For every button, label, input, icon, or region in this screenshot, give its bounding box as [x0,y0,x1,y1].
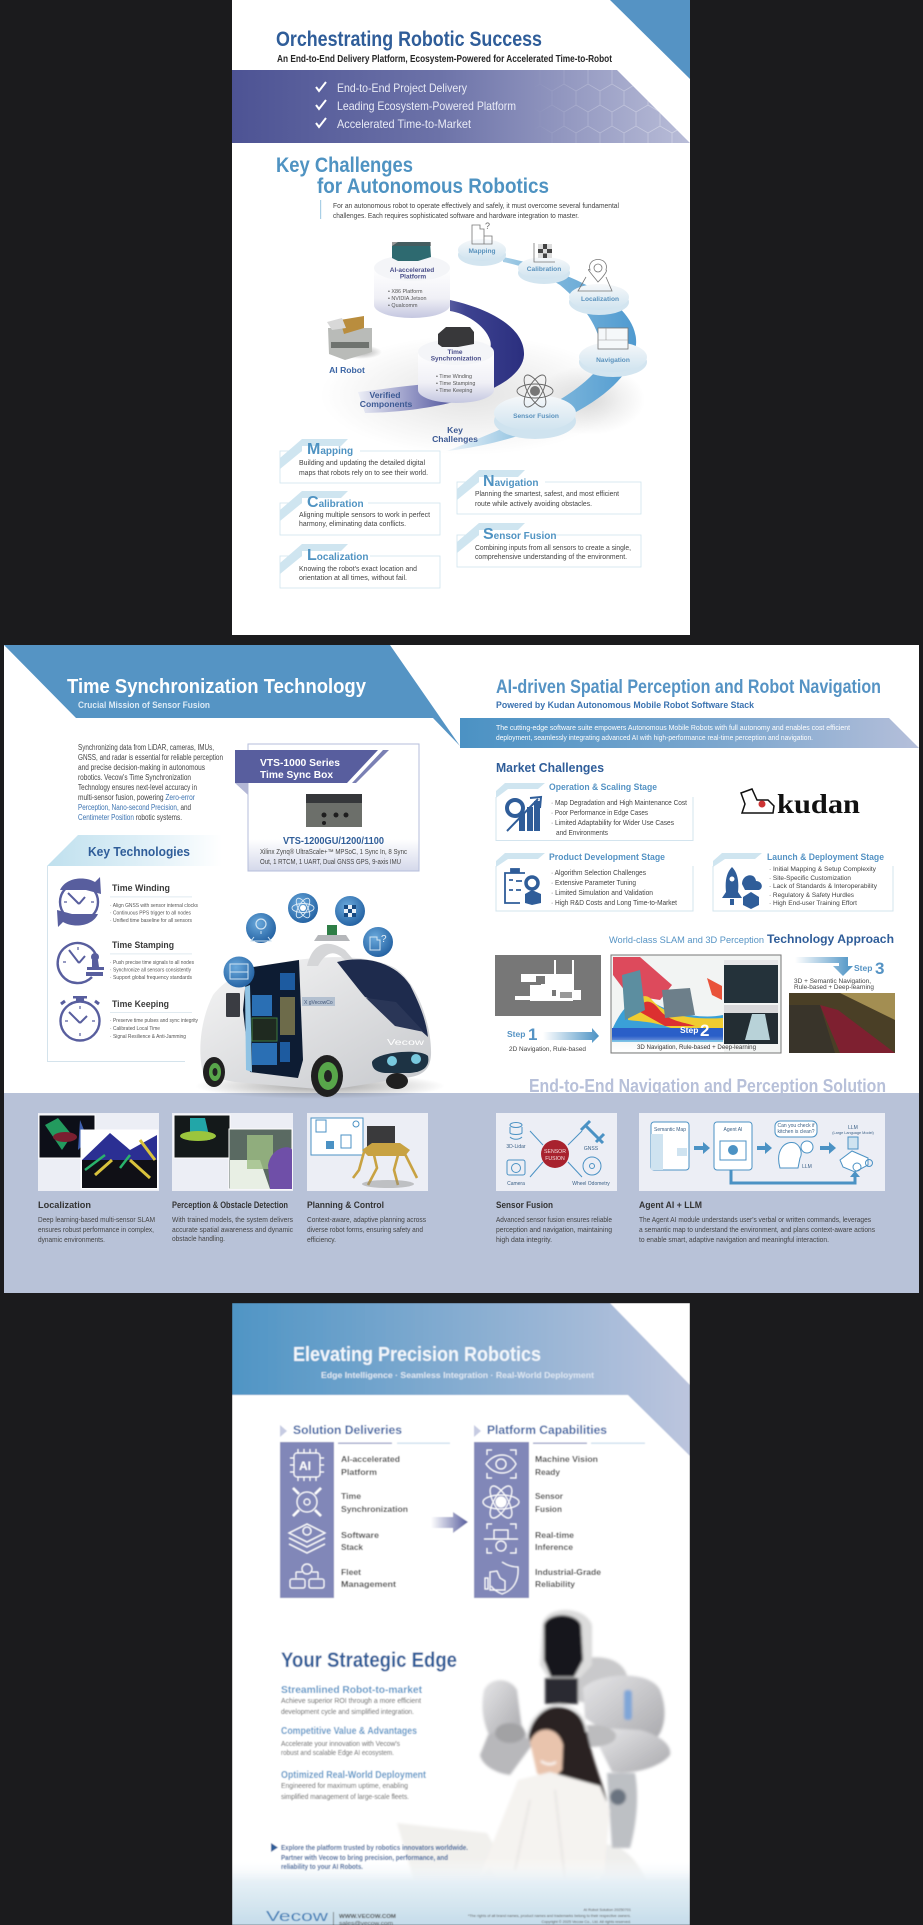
cylinder: time synchronization: • Time Keeping [436,388,472,394]
robot neck [545,1678,578,1704]
panel: vts-1000 series: VTS-1000 Series [260,758,340,769]
2d map [515,960,581,1001]
label: key challenges [432,425,478,444]
header ribbon: time synchronization: Time Synchronization Technology [67,676,367,698]
logo: kudan [741,789,860,819]
list labels: Software [341,1530,379,1540]
text: time winding [110,883,198,924]
windshield [337,959,428,1037]
headlights [372,1052,428,1073]
step 3: Step [854,963,872,973]
column: perception and obstacle detection [172,1113,293,1243]
robot right arm [583,1676,665,1740]
title: Orchestrating Robotic Success [276,28,542,51]
card: operation and scaling: · Limited Adaptability for Wider Use Cases [551,818,674,827]
icon: mapping ball: ? [381,934,387,945]
disc: navigation: Navigation [596,357,630,364]
list labels: Stack [341,1542,363,1552]
section heading: key challenges [276,154,549,198]
panel: key technologies: Key Technologies [88,845,190,859]
column: sensor fusion: Sensor Fusion [496,1200,553,1211]
agent pipeline diagram: LLM [802,1164,812,1170]
icon: localization ball [246,913,276,943]
card: operation and scaling [496,782,693,840]
cylinder: time synchronization [418,327,494,403]
cylinder: ai-accelerated platform: • X86 Platform [388,289,423,295]
panel: solution deliveries [280,1425,450,1598]
sensor fusion diagram: GNSS [584,1146,599,1152]
headband [527,1705,587,1738]
disc: mapping: ? [485,221,490,231]
blue arc [447,257,636,451]
robot lower body [607,1773,637,1848]
device: platform box [392,242,431,261]
header ribbon: Edge Intelligence · Seamless Integration · Real-World Deployment [321,1371,594,1380]
card: operation and scaling: Operation & Scaling Stage [549,782,657,793]
benefit: streamlined robot-to-market: Streamlined Robot-to-market [281,1684,422,1696]
laptop [397,1823,517,1891]
list labels: Management [341,1579,396,1589]
disc: sensor fusion [494,372,576,439]
footer: logo and contact: *The rights of all brand names, product names and trademarks belong to their respective owners. [468,1914,631,1918]
check list: Accelerated Time-to-Market [337,117,472,131]
text: time stamping: · Support global frequency standards [110,975,192,981]
cylinder: time synchronization: Synchronization [431,356,481,362]
text: time keeping: Time Keeping [112,999,169,1010]
card: launch and deployment: · Lack of Standards & Interoperability [769,883,878,890]
cylinder: ai-accelerated platform: Platform [400,274,426,280]
photo: robot and woman with headset [397,1610,670,1892]
list labels [535,1454,601,1589]
door label: X gVecowCo [304,1000,333,1006]
door label [302,997,335,1006]
intro text [320,200,619,220]
text: time keeping: · Signal Resilience & Anti-Jamming [110,1034,186,1040]
card: launch and deployment: · Site-Specific Customization [769,875,851,882]
column: planning and control: efficiency. [307,1235,336,1244]
panel: vts-1000 series: Out, 1 RTCM, 1 UART, Dual GNSS GPS, 9-axis IMU [260,859,401,866]
intro paragraph [78,743,223,822]
text: time stamping: · Push precise time signals to all nodes [110,960,194,966]
list labels: Machine Vision [535,1454,598,1464]
list labels: Ready [535,1467,560,1477]
intro paragraph: Technology ensures next-level accuracy in [78,783,197,792]
heading: technology approach [609,932,894,946]
panel: platform capabilities: Platform Capabilities [487,1425,607,1437]
plan panel and robot dog [311,1118,417,1188]
card: operation and scaling: · Poor Performance in Edge Cases [551,808,648,817]
column: planning and control: Planning & Control [307,1200,384,1211]
column: planning and control [307,1113,428,1244]
step 3: 3D + Semantic Navigation, [794,978,871,985]
sensor fusion diagram [506,1121,610,1187]
list labels [341,1454,408,1589]
icon: ai chip: AI [299,1459,311,1473]
benefit: optimized deployment: Engineered for maximum uptime, enabling [281,1783,408,1790]
icon: rocket and cloud [722,867,762,909]
list labels: Fusion [535,1504,562,1514]
icon: mapping ball [363,927,393,957]
list labels: Synchronization [341,1504,408,1514]
panel: vts-1000 series: VTS-1200GU/1200/1100 [283,836,384,847]
icon: shield [485,1562,518,1594]
disc: mapping [458,221,506,266]
lidar images [39,1115,158,1189]
text: time winding: · Continuous PPS trigger to all nodes [110,910,191,916]
footer: logo and contact: Vecow [266,1908,328,1925]
text: time winding: · Align GNSS with sensor internal clocks [110,903,198,909]
card: localization: orientation at all times, without fail. [299,573,407,582]
list labels: Time [341,1491,361,1501]
footer: logo and contact: Copyright © 2025 Vecow Co., Ltd. All rights reserved. [541,1920,631,1924]
banner: three benefits [232,70,690,143]
panel: vts-1000 series [235,744,419,871]
intro paragraph: and precise decision-making in autonomous [78,763,205,772]
section heading: key challenges: for Autonomous Robotics [317,175,549,198]
step 2: Step [680,1025,698,1035]
sensor fusion diagram: Wheel Odometry [572,1181,610,1187]
heading: your strategic edge: Your Strategic Edge [281,1649,457,1672]
page 2: technology spread [4,645,919,1293]
icon: fleet management [290,1564,324,1588]
cylinder: time synchronization: • Time Winding [436,374,472,380]
card: launch and deployment: · Regulatory & Safety Hurdles [769,892,855,899]
column: sensor fusion: Advanced sensor fusion ensures reliable [496,1215,612,1224]
cylinder: ai-accelerated platform [374,242,450,318]
column: localization: ensures robust performance in complex, [38,1225,154,1234]
icon: software stack [289,1524,325,1553]
icon: ai chip [290,1449,324,1481]
icon: ai robot [327,316,382,360]
step 1: Step [507,1029,525,1039]
list labels: Industrial-Grade [535,1567,601,1577]
icon: checklist and gear [505,869,541,905]
icon: time winding [57,877,101,927]
page 1: orchestrating robotic success [232,0,690,635]
step 1: 2D Navigation, Rule-based [509,1046,586,1053]
call to action: Explore the platform trusted by robotics innovators worldwide. [281,1845,468,1852]
cylinder: ai-accelerated platform: • Qualcomm [388,303,418,309]
subtitle: An End-to-End Delivery Platform, Ecosystem-Powered for Accelerated Time-to-Robot [277,54,613,65]
column: perception and obstacle detection: With trained models, the system delivers [172,1215,293,1224]
footer: logo and contact [266,1908,631,1925]
list labels: Real-time [535,1530,574,1540]
logo: kudan: kudan [777,789,860,819]
panel: vts-1000 series: Time Sync Box [260,770,333,781]
call to action [271,1843,468,1871]
heading: end-to-end solution: End-to-End Navigation and Perception Solution [529,1076,886,1096]
column: localization: dynamic environments. [38,1235,105,1244]
intro text: challenges. Each requires sophisticated software and hardware integration to master. [333,211,579,220]
card: sensor fusion: comprehensive understanding of the environment. [475,552,627,561]
disc: localization: Localization [581,296,619,303]
label: verified components: Verified [369,390,401,400]
ribbon: software stack summary [460,718,919,748]
label: key challenges: Key [447,425,463,435]
text: time keeping: · Calibrated Local Time [110,1026,160,1032]
card: operation and scaling: · Map Degradation and High Maintenance Cost [551,798,687,807]
icon: time keeping [60,996,100,1040]
illustration: autonomous vehicle: Vecow [387,1037,425,1047]
text: time stamping: · Synchronize all sensors consistently [110,968,191,974]
benefit: competitive value [281,1725,417,1757]
cylinder: ai-accelerated platform: • NVIDIA Jetson [388,296,426,302]
card: calibration: harmony, eliminating data conflicts. [299,519,406,528]
card: product development: Product Development Stage [549,852,665,863]
icon: inference [484,1524,518,1553]
list labels: Inference [535,1542,573,1552]
card: sensor fusion: Combining inputs from all sensors to create a single, [475,543,631,552]
list labels: AI-accelerated [341,1454,400,1464]
arrow [795,957,853,976]
intro paragraph: robotics. Vecow's Time Synchronization [78,773,191,782]
step 3: Rule-based + Deep-learning [794,984,874,991]
heading: market challenges: Market Challenges [496,761,604,775]
card: mapping: Mapping [307,441,353,458]
card: product development: · Extensive Parameter Tuning [551,878,636,887]
agent pipeline diagram: Agent AI [724,1127,742,1133]
disc: sensor fusion: Sensor Fusion [513,413,559,420]
icon: sensor fusion ball [288,893,318,923]
header ribbon [232,1303,690,1456]
footer gradient [232,1858,690,1925]
card: operation and scaling: and Environments [556,828,608,837]
card: calibration [280,491,440,535]
benefit: competitive value: Accelerate your innovation with Vecow's [281,1741,400,1748]
cargo doorway [226,960,303,1078]
ribbon [235,783,248,795]
card: mapping [280,439,440,483]
icon: time stamping [58,943,104,983]
step 2: 2 [700,1021,709,1040]
section heading: key challenges: Key Challenges [276,154,413,177]
heading: technology approach: Technology Approach [767,932,894,946]
disc: calibration: Calibration [527,266,561,273]
heatmap [612,957,724,1052]
label: key challenges: Challenges [432,434,478,444]
card: launch and deployment: · High End-user Training Effort [769,900,857,907]
card: product development [496,852,693,911]
column: agent ai and llm: to enable smart, adaptive navigation and meaningful interaction. [639,1235,829,1244]
heading: technology approach: World-class SLAM and 3D Perception [609,935,764,945]
arrow: deliveries to capabilities [431,1512,468,1533]
illustration: autonomous vehicle [195,925,445,1099]
header ribbon: time synchronization: Crucial Mission of Sensor Fusion [78,700,210,711]
icon: navigation ball [224,956,254,988]
step 3 [789,957,895,1053]
column: localization [38,1113,159,1244]
card: launch and deployment: · Initial Mapping & Setup Complexity [769,866,877,873]
agent pipeline diagram: (Large Language Model) [832,1131,875,1135]
intro text: For an autonomous robot to operate effectively and safely, it must overcome several fundamental [333,201,619,210]
ribbon: software stack summary: deployment, seamlessly integrating advanced AI with high-performance real-time perception and navigation. [496,735,813,742]
card: sensor fusion [457,523,641,567]
text: time stamping: Time Stamping [112,940,174,951]
sensor fusion diagram: 3D-Lidar [506,1144,526,1150]
roof arch and sensor [307,944,358,966]
column: planning and control: Context-aware, adaptive planning across [307,1215,426,1224]
step 1: 1 [528,1025,537,1044]
column: perception and obstacle detection: obstacle handling. [172,1234,225,1243]
woman face [530,1730,563,1783]
card: localization: Knowing the robot's exact location and [299,564,417,573]
panel: key technologies [47,835,222,1062]
device photo [306,794,362,827]
disc: mapping: Mapping [468,248,496,255]
card: product development: · High R&D Costs and Long Time-to-Market [551,898,677,907]
wheels [203,1055,408,1097]
disc: navigation [579,328,647,377]
card: localization: Localization [307,547,368,564]
column: localization: Localization [38,1200,91,1211]
cylinder: time synchronization: • Time Stamping [436,381,475,387]
card: calibration: Calibration [307,494,364,511]
card: launch and deployment [713,852,893,911]
panel: vts-1000 series: Xilinx Zynq® UltraScale+™ MPSoC, 1 Sync In, 8 Sync [260,848,407,856]
icon: eye [486,1450,516,1478]
column: perception and obstacle detection: accurate spatial awareness and dynamic [172,1225,293,1234]
agent pipeline diagram: kitchen is clean? [778,1129,815,1135]
blouse [478,1772,610,1887]
intro paragraph: Synchronizing data from LiDAR, cameras, IMUs, [78,743,214,752]
footer: logo and contact: AI Robot Solution 20250701 [584,1908,631,1912]
card: mapping: maps that robots rely on to see their world. [299,468,428,477]
text: time stamping [110,940,194,981]
heading: ai-driven spatial perception: Powered by Kudan Autonomous Mobile Robot Software Stack [496,700,755,711]
list labels: Sensor [535,1491,564,1501]
warehouse photo [789,993,895,1053]
check list: End-to-End Project Delivery [337,81,467,95]
agent pipeline diagram: Can you check if [778,1123,815,1129]
benefit: competitive value: Competitive Value & Advantages [281,1725,417,1737]
column: agent ai and llm: The Agent AI module understands user's verbal or written commands, leverages [639,1215,871,1224]
card: localization [280,544,440,588]
footer: logo and contact: WWW.VECOW.COM [339,1914,396,1920]
intro paragraph: Centimeter Position robotic systems. [78,813,182,822]
benefit: optimized deployment: simplified management of large-scale fleets. [281,1794,409,1801]
agent pipeline diagram: Semantic Map [654,1127,686,1133]
card: navigation: route while actively avoiding obstacles. [475,499,592,508]
column: agent ai and llm [639,1113,885,1244]
disc: localization [569,260,629,315]
vehicle body [200,957,431,1090]
label: ai robot: AI Robot [329,365,365,375]
cylinder: ai-accelerated platform: AI-accelerated [390,267,434,274]
intro paragraph: GNSS, and radar is essential for reliable perception [78,753,223,762]
panel: platform capabilities [474,1425,645,1598]
card: product development: · Algorithm Selection Challenges [551,868,646,877]
column: perception and obstacle detection: Perception & Obstacle Detection [172,1200,288,1211]
call to action: Partner with Vecow to bring precision, performance, and [281,1855,448,1862]
text: time keeping [110,999,198,1040]
woman hair [528,1707,607,1802]
card: navigation [457,470,641,514]
camera insets [724,965,778,1003]
icon: time sync [293,1488,321,1516]
text: time winding: Time Winding [112,883,170,894]
intro paragraph: Perception, Nano-second Precision, and [78,803,191,812]
column: localization: Deep learning-based multi-sensor SLAM [38,1215,155,1224]
card: calibration: Aligning multiple sensors to work in perfect [299,510,431,519]
text: time winding: · Unified time baseline for all sensors [110,918,192,924]
panel: solution deliveries: Solution Deliveries [293,1425,402,1437]
agent pipeline diagram [651,1121,875,1183]
agent pipeline diagram: LLM [848,1125,858,1131]
column: sensor fusion: high data integrity. [496,1235,552,1244]
call to action: reliability to your AI Robots. [281,1864,363,1871]
intro paragraph: multi-sensor fusion, powering Zero-error [78,793,195,802]
column: agent ai and llm: a semantic map to understand the environment, and plans context-aware actions [639,1225,875,1234]
robot left arm [482,1680,522,1737]
ribbon: software stack summary: The cutting-edge software suite empowers Autonomous Mobile Robots with full autonomy and enables cost efficient [496,725,850,732]
sensor fusion diagram: SENSOR [544,1149,566,1155]
text: time keeping: · Preserve time pulses and sync integrity [110,1018,198,1024]
detection images [174,1115,292,1189]
benefit: streamlined robot-to-market [281,1684,422,1716]
disc: calibration [518,243,570,284]
card: mapping: Building and updating the detailed digital [299,458,425,467]
list labels: Platform [341,1467,377,1477]
icon: atom [483,1483,519,1521]
card: navigation: Navigation [483,473,538,490]
label: verified components [360,390,412,409]
benefit: optimized deployment [281,1769,426,1801]
diagram: components and challenges [320,221,647,455]
list labels: Reliability [535,1579,575,1589]
sensor fusion diagram: FUSION [545,1156,565,1162]
card: navigation: Planning the smartest, safest, and most efficient [475,489,620,498]
column: agent ai and llm: Agent AI + LLM [639,1200,702,1211]
arrow [543,1028,599,1043]
chair [600,1844,650,1892]
benefit: optimized deployment: Optimized Real-World Deployment [281,1769,426,1781]
corner triangle [610,0,690,79]
step 2: 3D Navigation, Rule-based + Deep-learning [637,1044,756,1051]
benefit: streamlined robot-to-market: development cycle and simplified integration. [281,1709,414,1716]
label: verified components: Components [360,399,412,409]
step 3: 3 [875,959,884,978]
icon: calibration ball [335,896,365,926]
heading: ai-driven spatial perception [496,677,881,711]
column: planning and control: diverse robot forms, ensuring safety and [307,1225,423,1234]
column: sensor fusion: perception and navigation, maintaining [496,1225,612,1234]
benefit: competitive value: robust and scalable Edge AI ecosystem. [281,1750,394,1757]
header ribbon: Elevating Precision Robotics [293,1344,541,1366]
step 2 [611,955,781,1053]
page 3: elevating precision robotics [232,1303,690,1925]
benefit: streamlined robot-to-market: Achieve superior ROI through a more efficient [281,1698,421,1705]
cylinder: time synchronization: Time [447,349,463,356]
robot head [540,1610,592,1678]
card: product development: · Limited Simulation and Validation [551,888,653,897]
step 1 [495,955,601,1053]
header ribbon: time synchronization [4,645,460,746]
sensor fusion diagram: Camera [507,1181,525,1187]
robot chest [560,1657,628,1705]
column: sensor fusion [496,1113,617,1244]
card: launch and deployment: Launch & Deployment Stage [767,852,884,863]
lavender band [4,1093,919,1293]
device: sync box [438,327,474,347]
icon: gear and growth [507,797,541,831]
list labels: Fleet [341,1567,361,1577]
card: sensor fusion: Sensor Fusion [483,526,556,543]
check list [316,81,516,131]
purple arc [358,300,524,413]
check list: Leading Ecosystem-Powered Platform [337,99,516,113]
